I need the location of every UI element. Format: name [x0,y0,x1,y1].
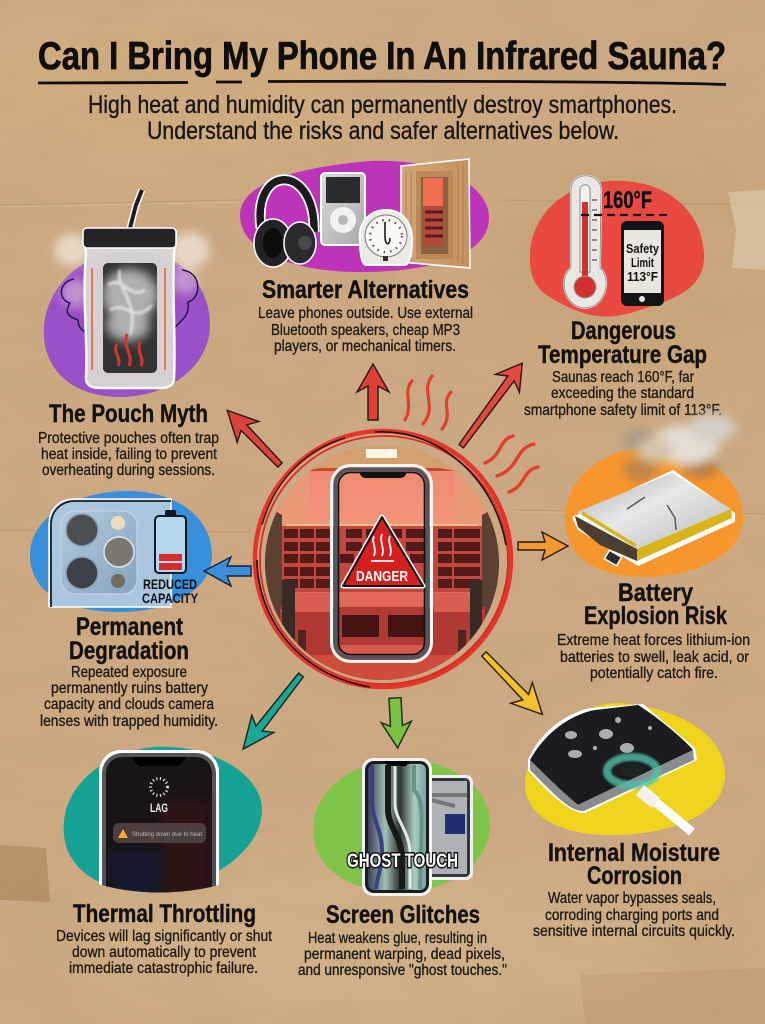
icon: headphones [254,180,316,267]
purple blob [44,250,210,397]
panel: screen glitches [298,758,507,979]
description: Heat weakens glue, resulting in [308,930,487,947]
arrow: to smarter alternatives [357,364,389,420]
heading: Smarter Alternatives [262,276,469,304]
label: reduced capacity: REDUCED [143,576,197,592]
icon: swollen battery [572,470,735,566]
description: overheating during sessions. [42,462,215,479]
red hand-drawn ring [255,431,511,687]
arrow: to corrosion [473,644,553,725]
icon: waterproof pouch [83,228,176,388]
description [524,369,722,419]
label: reduced capacity [142,576,199,606]
teal blob [64,747,262,892]
arrow: to screen glitches [380,697,413,749]
arrow: to degradation [204,557,251,586]
heading: Battery [618,579,693,607]
description: players, or mechanical timers. [274,338,456,355]
description: smartphone safety limit of 113°F. [524,402,722,419]
magenta blob [240,161,489,272]
description: Saunas reach 160°F, far [552,369,695,386]
description: lenses with trapped humidity. [40,713,218,730]
arrow: to pouch myth [216,400,291,475]
subtitle: Understand the risks and safer alternatives below. [147,117,619,145]
description [298,930,507,979]
description: Protective pouches often trap [38,430,219,447]
heading [69,613,189,665]
icon: wet phone [528,704,697,832]
steam behind pouch [54,232,210,307]
icon: mp3 player [321,173,365,245]
heading [548,839,720,890]
arrow: to battery [518,532,568,560]
heading: Screen Glitches [326,901,480,929]
description: corroding charging ports and [545,907,719,924]
description: Water vapor bypasses seals, [548,890,716,907]
description: Bluetooth speakers, cheap MP3 [271,322,460,339]
label: 160F: 160°F [603,187,652,214]
heading [538,317,707,369]
subtitle [88,91,677,145]
icon: phone safety limit: Safety [626,241,660,256]
panel: dangerous temperature gap [524,176,722,419]
central sauna illustration [255,431,511,687]
description: Devices will lag significantly or shut [56,928,272,945]
description [40,664,218,730]
description [56,928,272,977]
description: capacity and clouds camera [44,696,214,713]
panel: battery explosion risk [557,414,750,682]
icon: lanyard [130,190,142,228]
heat waves top [405,376,451,429]
description: permanent warping, dead pixels, [304,946,505,963]
icon: front phone [362,758,432,896]
description: heat inside, failing to prevent [41,446,217,463]
label: reduced capacity: CAPACITY [142,590,199,606]
icon: mechanical timer [360,210,412,265]
panel: permanent degradation [30,491,218,730]
yellow blob [525,703,725,835]
heading [584,579,727,630]
icon: low battery [155,510,186,573]
heading: Permanent [76,613,184,641]
orange blob [565,448,743,577]
heading: Corrosion [587,862,682,890]
icon: danger triangle: DANGER [356,568,408,585]
label: lag: LAG [150,801,168,815]
icon: sauna cabin [401,159,470,268]
description: exceeding the standard [551,385,694,402]
arrow: to temperature gap [449,354,534,455]
description: permanently ruins battery [51,680,208,697]
icon: back phone [425,775,473,880]
description: down automatically to prevent [72,944,256,961]
description: and unresponsive "ghost touches." [298,962,507,979]
heading: Thermal Throttling [73,900,256,928]
blue blob [30,491,212,612]
description: potentially catch fire. [590,665,718,682]
icon: phone safety limit: 113°F [627,269,658,284]
notification pill: Shutting down due to heat [132,831,202,838]
description [38,430,219,479]
heading: Dangerous [571,317,676,345]
red blob [530,181,704,316]
icon: phone safety limit [621,221,664,306]
description [258,305,473,355]
panel: internal moisture corrosion [525,703,735,940]
icon: danger triangle [343,517,423,586]
heading: Explosion Risk [584,602,727,630]
heading: Degradation [69,637,189,665]
panel: thermal throttling [56,747,272,977]
panel: smarter alternatives [240,159,489,355]
heading: The Pouch Myth [49,400,208,428]
description [533,890,735,940]
icon: thermometer [564,176,606,308]
icon: lagging phone [99,750,219,892]
heading: Temperature Gap [538,341,707,369]
description: sensitive internal circuits quickly. [533,923,735,940]
description: Leave phones outside. Use external [258,305,473,322]
phone with danger sign [332,466,432,662]
subtitle: High heat and humidity can permanently destroy smartphones. [88,91,677,119]
notification pill [113,823,206,843]
icon: camera module [49,499,171,607]
label: ghost touch: GHOST TOUCH [347,851,458,872]
heat waves right [485,436,538,492]
description: Repeated exposure [71,664,187,681]
green blob [313,760,490,892]
arrow: to throttling [232,666,312,758]
icon: phone safety limit: Limit [631,255,654,270]
panel: the pouch myth [38,190,219,479]
heading: Internal Moisture [548,839,720,867]
smoke [622,414,736,482]
description: immediate catastrophic failure. [69,960,258,977]
description [557,632,750,682]
icon: spinner [150,778,168,796]
sauna scene [265,445,500,685]
